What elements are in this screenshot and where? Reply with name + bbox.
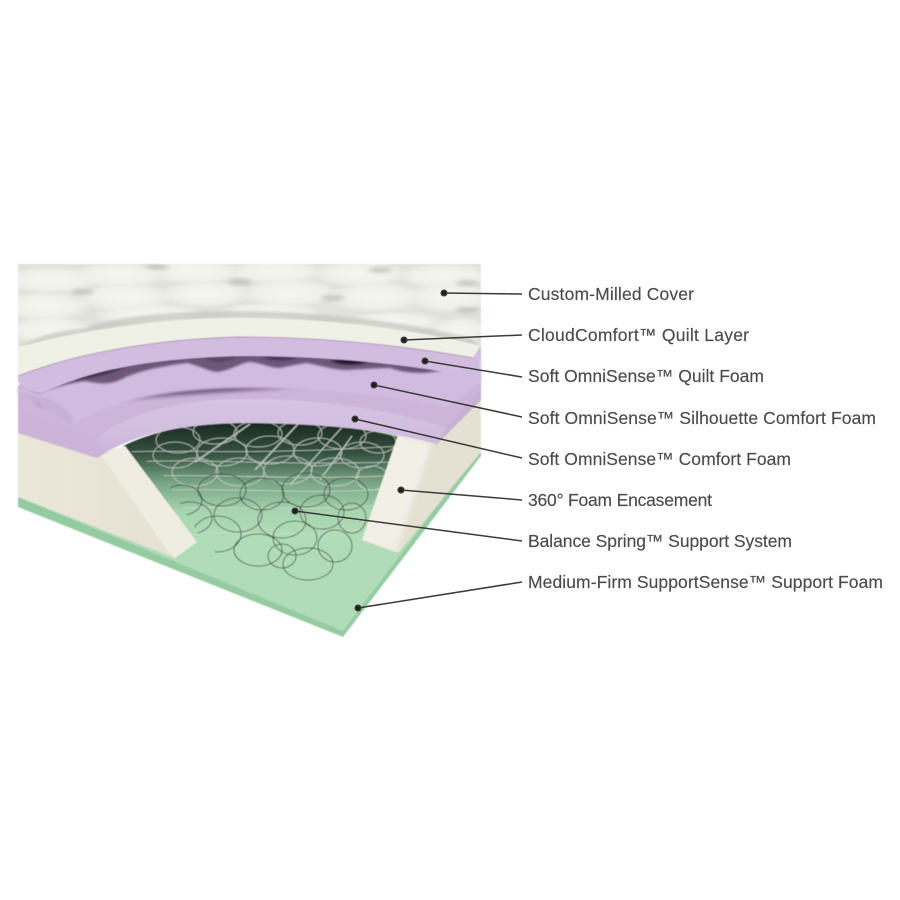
layer: foam encasement right [358,395,481,553]
pointer: quilt foam [422,358,522,377]
label: support foam: Medium-Firm SupportSense™ Support Foam [528,572,883,592]
mattress cutaway illustration [0,259,495,637]
layer: quilt layer [18,318,481,376]
pointer: silhouette foam [371,382,522,417]
layer: foam encasement left [18,430,197,558]
layer: spring support system [123,420,400,580]
pointer: spring system [292,508,522,541]
labels [528,284,883,592]
pointer: quilt layer [401,335,522,343]
layer: custom-milled cover [18,264,482,347]
layer: quilt foam [18,325,481,393]
label: comfort foam: Soft OmniSense™ Comfort Foam [528,449,791,469]
pointer: support foam [355,582,522,611]
layer: support foam base [18,430,481,637]
label: springs: Balance Spring™ Support System [528,531,792,551]
label: quilt layer: CloudComfort™ Quilt Layer [528,325,749,345]
pointer: custom-milled cover [441,290,522,296]
label: encasement: 360° Foam Encasement [528,490,712,510]
pointer: encasement [398,487,522,500]
leader lines and dots [292,290,522,611]
label: silhouette foam: Soft OmniSense™ Silhouette Comfort Foam [528,408,876,428]
layer: silhouette comfort foam [18,342,481,425]
layer: comfort foam [18,360,481,458]
label: quilt foam: Soft OmniSense™ Quilt Foam [528,366,764,386]
pointer: comfort foam [352,416,522,458]
label: cover: Custom-Milled Cover [528,284,694,304]
